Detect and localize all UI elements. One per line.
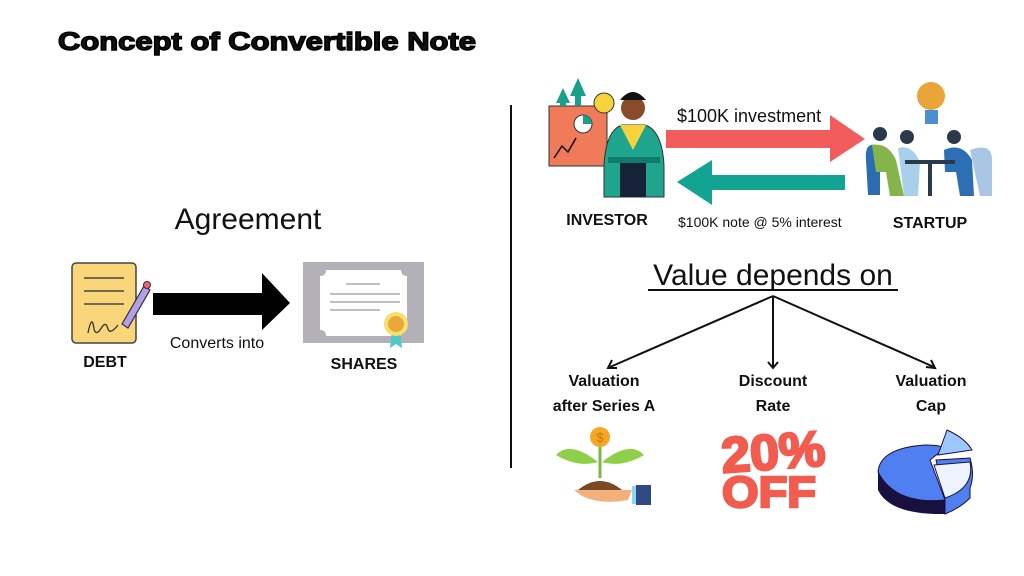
label: valuation after series a: Valuation [568,373,640,390]
label: valuation after series a: after Series A [553,398,656,415]
label: converts into: Converts into [170,335,264,352]
label: startup: STARTUP [893,215,968,232]
label: valuation cap: Valuation [895,373,967,390]
icon: share certificate [303,262,424,348]
arrows: branches [608,296,935,368]
label: discount rate: Rate [756,398,790,415]
label: valuation cap: Cap [916,398,946,415]
arrow: note [677,160,845,205]
label: discount rate [739,373,808,415]
label: note interest: $100K note @ 5% interest [678,214,842,230]
label: valuation after series a [553,373,656,415]
label: shares: SHARES [331,356,398,373]
icon: pie chart [878,430,972,514]
arrow: investment [666,115,865,162]
label: discount rate: Discount [739,373,808,390]
label: investor: INVESTOR [566,212,648,229]
label: investment: $100K investment [677,106,821,126]
heading: agreement: Agreement [175,203,322,236]
icon: 20% off [719,420,827,517]
icon: plant in hand: $ [596,430,604,445]
icon: 20% off: 20% [719,420,827,484]
label: valuation cap [895,373,967,415]
icon: 20% off: OFF [722,468,816,517]
heading: value depends on: Value depends on [653,259,893,292]
icon: plant in hand [556,427,651,505]
icon: investor [549,78,664,197]
label: debt: DEBT [83,354,127,371]
arrow: converts [153,273,290,330]
icon: startup team [866,82,992,196]
title: Concept of Convertible Note [58,28,476,56]
icon: debt document [72,263,150,343]
